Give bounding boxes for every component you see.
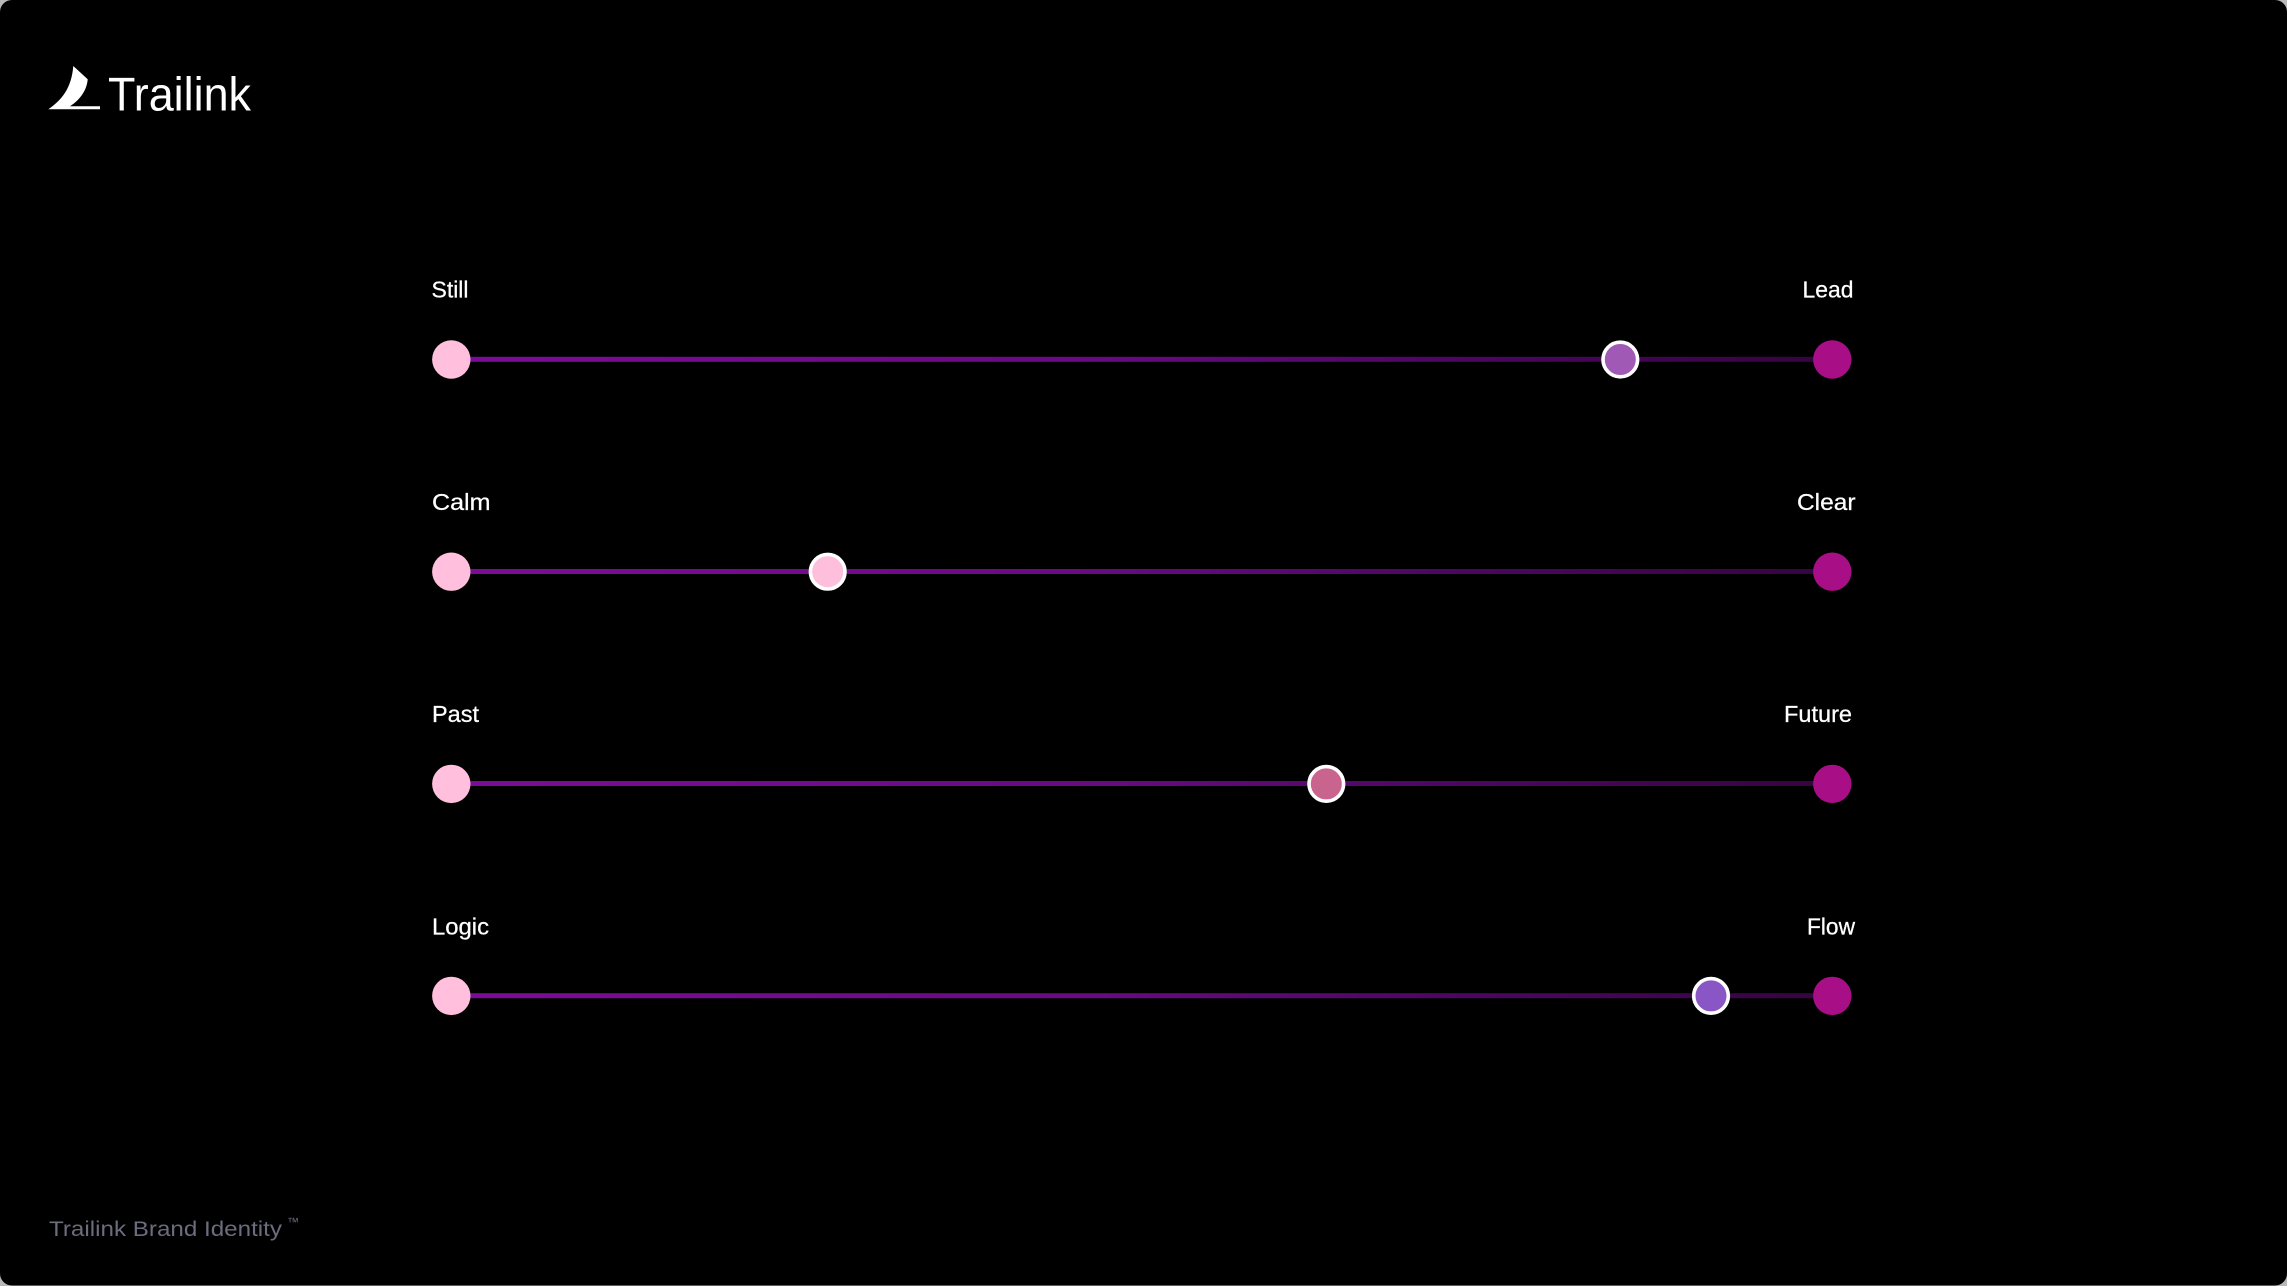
- footer: brand identity caption: [49, 1215, 299, 1241]
- slider track: [451, 993, 1832, 998]
- right endpoint: [1813, 765, 1852, 803]
- right endpoint: [1813, 977, 1852, 1015]
- footer text: Trailink Brand Identity: [49, 1217, 282, 1241]
- icon: sail mark: [48, 66, 100, 109]
- thumb: [1603, 342, 1638, 377]
- label: Calm: Calm: [432, 489, 490, 515]
- left endpoint: [432, 765, 470, 803]
- label: Lead: Lead: [1802, 277, 1854, 303]
- slider track: [451, 569, 1832, 574]
- left endpoint: [432, 552, 470, 591]
- logo: Trailink: [48, 66, 251, 121]
- left endpoint: [432, 977, 470, 1015]
- slider: Logic to Flow: [432, 913, 1855, 1015]
- label: Past: Past: [432, 701, 480, 727]
- slider: Calm to Clear: [432, 489, 1856, 591]
- slider: Past to Future: [432, 701, 1852, 803]
- right endpoint: [1813, 552, 1852, 591]
- slider track: [451, 781, 1832, 786]
- logo wordmark: Trailink: [108, 68, 251, 121]
- thumb: [810, 554, 845, 589]
- label: Logic: Logic: [432, 913, 489, 939]
- thumb: [1309, 767, 1344, 801]
- right endpoint: [1813, 340, 1852, 379]
- slider track: [451, 357, 1832, 362]
- trademark: ™: [287, 1215, 299, 1229]
- label: Future: Future: [1784, 701, 1852, 727]
- slider: Still to Lead: [432, 277, 1854, 379]
- thumb: [1694, 979, 1728, 1013]
- left endpoint: [432, 340, 470, 379]
- label: Flow: Flow: [1807, 913, 1855, 939]
- label: Still: Still: [432, 277, 468, 303]
- label: Clear: Clear: [1797, 489, 1856, 515]
